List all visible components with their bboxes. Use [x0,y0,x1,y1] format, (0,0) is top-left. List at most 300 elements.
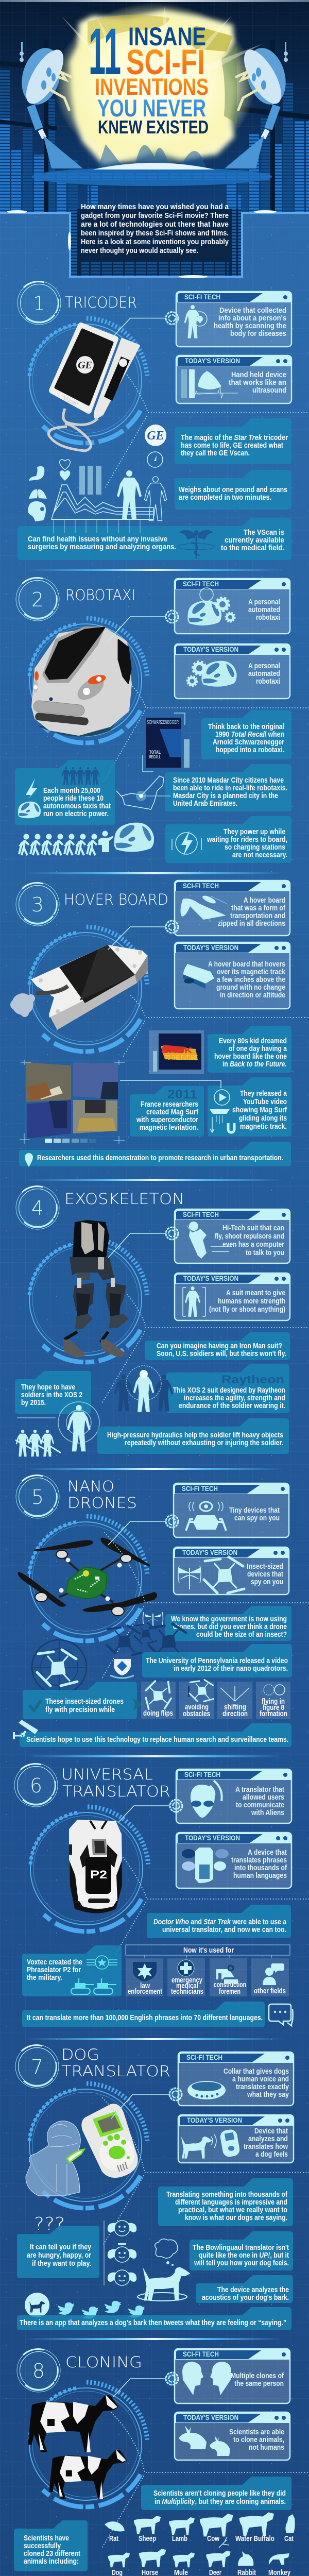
device: phraselator p2: P2 [90,1868,107,1881]
poster: total recall: RECALL [149,754,161,759]
icon: map pin [25,1153,33,1167]
icon: collar [187,2081,226,2099]
panel: sci-fi tech [178,2052,294,2106]
title: KNEW EXISTED [98,116,209,138]
dotted connector [102,1295,309,1402]
icon: figure solid [117,470,142,519]
callout: youtube [208,1077,291,1137]
panel: today's version: into thousands of [234,1863,287,1872]
panel: today's version: TODAY'S VERSION [183,943,238,952]
panel: today's version: Insect-sized [247,1562,283,1571]
callout: fly with precision: fly with precision while [45,1705,115,1714]
panel: sci-fi tech: that was a form of [231,904,286,912]
tile: shifting direction [217,1682,252,1719]
callout: masdar city [165,764,291,811]
badge 1 [18,281,61,325]
panel: today's version: a dog feels [255,2150,288,2159]
panel: today's version [178,2115,294,2163]
section 7: dog translator [15,2045,309,2340]
callout: translating: practical, but what we really want to [178,2206,287,2214]
gear marker [166,312,178,325]
callout: 23 animals: successfully [24,2541,61,2550]
panel: sci-fi tech: with Aliens [251,1808,284,1817]
panel: today's version: ground with no change [216,983,285,992]
ticks under chart [54,519,140,533]
icon: spy drone [186,1502,226,1531]
connector [108,1233,166,1258]
tile: figure 8: figure 8 [263,1703,284,1712]
panel: sci-fi tech: A translator that [235,1785,284,1794]
section 2: robotaxi [15,578,309,874]
callout: star trek: The magic of the Star Trek tricoder [181,433,288,442]
animal labels: Sheep [139,2534,156,2543]
tile: emergency medical technicians: emergency [171,1976,202,1985]
panel: sci-fi tech: what they say [247,2090,289,2099]
divider [26,2338,283,2340]
device: vscan [48,326,139,451]
panel: sci-fi tech: to communicate [236,1801,284,1809]
callout: hungry happy: are hungry, happy, or [27,2251,91,2260]
panel: sci-fi tech [176,292,291,347]
panel: sci-fi tech: health by scanning the [214,321,286,330]
hover board [10,945,148,1030]
tile: law enforcement: law [140,1981,150,1990]
section 1: tricoder [18,281,309,571]
callout: acoustics [196,2275,293,2303]
tile: shifting direction: direction [222,1709,248,1718]
figure: xos 2 soldier [114,1366,173,1412]
callout: 80s kid: Every 80s kid dreamed [219,1037,287,1045]
connector [108,927,166,950]
callout: doctor who: universal translator, and now we can too. [162,1925,286,1934]
panel: sci-fi tech: can spy on you [234,1514,280,1522]
gear marker [166,1515,178,1528]
panel: today's version [176,355,291,403]
panel: sci-fi tech: SCI-FI TECH [183,580,219,588]
callout: search and surveillance [20,1723,291,1747]
badge 5: 5 [31,1486,44,1509]
heading: universal translator: TRANSLATOR [62,1783,170,1800]
callout: multiplicity: in Multiplicity, but they are cloning animals. [154,2497,286,2506]
callout: 80s kid: of one day having a [229,1044,287,1053]
connector [108,1521,166,1545]
callout: doctor who: Doctor Who and Star Trek were able to use a [153,1918,287,1926]
panel: today's version [176,1833,291,1888]
panel: sci-fi tech: robotaxi [256,613,280,622]
callout: charging [165,816,291,863]
icons: dark drones [107,1623,187,1658]
header illustration [0,0,309,212]
badge 7: 7 [31,2056,43,2078]
platform [32,163,272,212]
icon: GE logo [145,425,166,446]
callout: hungry happy: if they want to play. [32,2259,91,2268]
panel: today's version: Hand held device [231,370,286,379]
section 3: hover board [10,880,309,1181]
callout: hungry happy [17,2226,99,2278]
section 4: exoskeleton [15,1186,309,1470]
heading: universal translator [61,1766,170,1800]
callout: monthly riders [15,760,115,825]
icons: queue of people [19,831,113,855]
callout: hydraulics [97,1418,289,1454]
callout: weight: Weighs about one pound and scans [179,485,287,494]
icon: military star [87,1956,117,1969]
callout: organs [18,518,291,560]
icon: flying suit [187,1222,231,1259]
callout: acoustics: acoustics of your dog's bark. [202,2293,289,2302]
connector [113,318,166,336]
intro text: Here is a look at some inventions you probably [81,238,229,246]
icon: gauge [147,452,163,467]
intro text [81,202,229,255]
heading: dog translator: TRANSLATOR [61,2062,170,2080]
panel: sci-fi tech: allowed users [243,1793,284,1802]
animal labels: Rat [109,2534,118,2543]
heading: nano drones: DRONES [67,1494,137,1512]
callout: charging: are not necessary. [232,851,287,859]
panel: today's version: to clone animals, [233,2435,284,2444]
panel: sci-fi tech: SCI-FI TECH [183,2350,219,2358]
tile: figure 8 [256,1682,290,1719]
panel: today's version: translates how [244,2142,288,2151]
intro text: gadget from your favorite Sci-Fi movie? There [81,211,229,220]
dotted connector [122,995,309,1058]
icon: penn shield [110,1654,134,1678]
panel: today's version: human languages [233,1871,287,1880]
icon: two heads [182,2362,231,2395]
quadrotor [18,1538,157,1616]
panel: today's version [174,1547,289,1595]
callout: total recall: 1990 Total Recall when [215,730,284,739]
panel: today's version: A device that [248,1848,287,1857]
badge 1: 1 [33,292,45,315]
panel: sci-fi tech: fly, shoot repulsors and [215,1232,284,1241]
callout: research [19,1142,291,1167]
dotted connector [102,2098,309,2246]
poster: total recall: SCHWARZENEGGER [147,719,179,725]
callout: iron man: Can you imagine having an Iron Man suit? [157,1342,282,1350]
intro text: never thought you would actually see. [81,246,198,255]
icon: check [29,1700,41,1710]
animal labels: Cow [207,2534,219,2543]
callout: 2011 mag surf: 2011 [167,1088,197,1101]
cows [28,2395,127,2499]
callout: 2011 mag surf: magnetic levitation. [140,1123,198,1132]
used for heading [126,1945,290,1958]
panel: today's version: TODAY'S VERSION [187,2116,242,2124]
gear marker [166,1227,178,1240]
device: vscan: GE [78,360,92,371]
vehicle: taxi side [114,823,154,852]
panel: today's version: ultrasound [252,386,286,395]
heading: cloning: CLONING [65,2353,142,2371]
callout: youtube: magnetic track. [240,1122,287,1131]
tile: figure 8: flying in [262,1697,285,1706]
callout: masdar city: Since 2010 Masdar City citizens have [173,776,284,785]
callout: youtube: YouTube video [243,1097,287,1106]
panel: sci-fi tech: A personal [248,598,280,606]
callout: charging: so charging stations [225,843,285,852]
callout: soldiers by 2015 [15,1371,91,1414]
badge 4 [16,1186,59,1229]
panel: sci-fi tech [176,1769,291,1823]
panel: sci-fi tech [175,579,290,634]
animal labels: Lamb [172,2534,187,2543]
tile: law enforcement [126,1958,163,1996]
icon: dragonfly [143,1612,163,1628]
callout: 2011 mag surf: created Mag Surf [146,1108,199,1116]
panel: today's version: in direction or altitude [220,991,285,999]
callout: 2011 mag surf: with superconductor [136,1115,198,1124]
callout: monthly riders: people ride these 10 [43,794,104,803]
callout: monthly riders: Each month 25,000 [43,786,100,795]
panel: sci-fi tech: Collar that gives dogs [224,2067,289,2076]
connector [108,617,166,641]
badge 2: 2 [31,588,44,611]
callout: total recall: hopped into a robotaxi. [216,745,284,754]
poster: total recall: TOTAL [149,750,161,755]
title: YOU NEVER [97,94,206,122]
callout: organs: Can find health issues without any invasive [28,535,167,544]
callout: bowlinguaul: quite like the one in UP!, but it [199,2251,289,2260]
tile: emergency medical technicians: medical [176,1981,198,1990]
callout: translating [158,2178,293,2226]
hud ring [29,618,147,743]
callout: voxtec: Phraselator P2 for [27,1965,81,1974]
callout: total recall: Arnold Schwarzenegger [213,738,284,747]
hud ring [29,318,147,443]
panel: today's version: a few inches above the [217,975,285,984]
callout: 2011 mag surf: France researchers [141,1100,198,1109]
panel: today's version: TODAY'S VERSION [183,645,238,653]
animal labels [109,2534,294,2576]
icon: dog app [25,2293,49,2317]
panel: today's version [175,644,290,699]
icon: people [61,767,100,785]
badge 3: 3 [31,893,44,916]
panel: sci-fi tech: the same person [234,2379,284,2388]
badge 5 [16,1475,59,1518]
panel: sci-fi tech: even has a computer [222,1240,284,1249]
panel: today's version: over its magnetic track [217,968,286,976]
panel: today's version: TODAY'S VERSION [185,1834,240,1842]
panel: today's version: devices that [247,1570,283,1579]
tile: construction foremen [210,1958,247,1996]
heading: dog translator: DOG [61,2046,99,2063]
panel: today's version [175,2412,290,2460]
callout: university of pennsylvania [142,1644,292,1677]
callout: iron man [145,1332,290,1360]
chart: scan waves [52,485,153,519]
callout: star trek: has come to life, GE created what [181,441,283,450]
section 6: universal translator [14,1764,309,2040]
heading: hover board: HOVER BOARD [64,891,168,908]
icon: figure outline [144,477,167,520]
callout: star trek: they call the GE Vscan. [181,449,250,457]
callout: youtube: They released a [240,1089,287,1098]
icon: targeted suit [58,1402,99,1451]
title [89,15,209,138]
map: uae [116,776,171,809]
icon: small taxi [18,802,41,818]
panel: sci-fi tech: SCI-FI TECH [182,1484,218,1493]
panel: today's version: humans more strength [218,1297,285,1306]
gear marker [170,1800,182,1812]
left lamp [16,42,83,168]
icon: chat bubbles [269,2004,293,2026]
divider [26,2038,283,2040]
panel: sci-fi tech: Multiple clones of [231,2371,284,2380]
callout: charging: They power up while [224,827,285,836]
panel: sci-fi tech [175,880,290,936]
badge 8: 8 [32,2360,45,2382]
icon: bolt recharge [172,831,201,856]
section 8: cloning [14,2349,309,2576]
callout: charging: waiting for riders to board, [207,835,287,844]
panel: sci-fi tech: Hi-Tech suit that can [222,1224,284,1232]
poster: back to the future: TO THE FUTURE [165,1054,198,1061]
callout: raytheon [166,1364,289,1413]
tile: shifting direction: shifting [224,1703,246,1711]
tile: figure 8: formation [260,1709,287,1718]
title: SCI-FI [126,42,205,82]
panel: sci-fi tech: info about a person's [218,314,286,323]
intro text: been inspired by these Sci-Fi shows and films. [81,229,229,238]
animal labels: Water Buffalo [235,2534,274,2543]
panel: today's version: analyzes and [248,2134,288,2143]
tile: construction foremen: construction [214,1980,246,1989]
icons: dog moods [104,2221,136,2285]
panel: today's version: translates phrases [231,1856,287,1865]
panel: sci-fi tech: SCI-FI TECH [184,1770,220,1778]
icon: suit figure [183,1286,205,1317]
icon: camera [13,1720,38,1739]
gear marker [166,921,178,933]
panel: sci-fi tech [174,1483,289,1537]
panel: sci-fi tech: transportation and [230,911,285,920]
tile: avoiding obstacles: obstacles [183,1709,210,1718]
gear marker [166,611,178,623]
callout: hungry happy: It can tell you if they [30,2243,92,2251]
hud ring [30,1807,148,1931]
connector [113,2379,166,2397]
dotted connector [105,375,309,489]
panel: sci-fi tech: SCI-FI TECH [186,2053,222,2061]
callout: youtube: showing Mag Surf [232,1106,287,1114]
callout: 23 animals: Scientists have [24,2534,69,2543]
panel: sci-fi tech: SCI-FI TECH [183,1210,219,1218]
panel: today's version: robotaxi [256,677,280,686]
panel: today's version: A personal [248,662,280,670]
callout: 2011 mag surf [130,1086,204,1137]
panel: today's version: TODAY'S VERSION [182,1548,237,1556]
section 5: nano drones [13,1475,309,1757]
heading: dog translator [61,2046,170,2080]
tile: other fields: other fields [254,1987,286,1995]
callout: voxtec: Voxtec created the [27,1958,82,1967]
device: vscan: Vscan [62,395,79,408]
panel: sci-fi tech: zipped in all directions [218,919,285,928]
callout: organs: The VScan is [244,528,284,537]
intro text: are a lot of technologies out there that have [81,220,229,229]
callout: youtube: gliding along its [239,1114,287,1123]
callout: 23 animals [14,2520,88,2571]
icon: robotaxi and gears [187,588,235,625]
panel: today's version: Scientists are able [229,2428,284,2436]
heading: nano drones [67,1478,137,1512]
tile: law enforcement: enforcement [128,1987,162,1996]
callout: organs: currently available [225,536,284,545]
panel: sci-fi tech: automated [248,605,280,614]
panel: today's version: spy on you [251,1578,283,1586]
callout: organs: to the medical field. [221,544,284,552]
callout: voxtec [22,1945,122,1996]
icon: crosshair drone [32,1640,87,1694]
exoskeleton [63,1220,129,1358]
callout: raytheon: Raytheon [221,1373,284,1386]
device: phraselator p2 [69,1820,122,1913]
callout: soldiers by 2015: They hope to have [21,1383,75,1392]
icon: caduceus [178,530,215,558]
divider [26,872,283,874]
callout: masdar city: United Arab Emirates. [173,799,237,808]
divider [26,1468,283,1470]
icon: bolt [26,778,37,799]
heading: universal translator: UNIVERSAL [61,1766,153,1783]
gear marker [166,2372,178,2385]
callout: fly with precision [23,1682,143,1719]
callout: total recall: Think back to the original [208,722,284,731]
tile: avoiding obstacles: avoiding [185,1703,209,1711]
panel: sci-fi tech: body for diseases [230,329,286,338]
callout: 100,000 phrases [22,2002,265,2027]
panel: today's version: that works like an [229,378,286,387]
icon: dog and device [181,2128,241,2159]
hud ring [29,927,147,1052]
callout: voxtec: the military. [27,1973,62,1982]
callout: weight [175,470,291,510]
panel: today's version: A suit meant to give [226,1289,285,1297]
heading: nano drones: NANO [67,1478,114,1495]
callout: twitter app [17,2307,291,2330]
panel: today's version: automated [248,669,280,678]
callout: soldiers by 2015: by 2015. [21,1398,46,1407]
question marks: ??? [34,2214,65,2234]
divider [26,1179,283,1181]
right lamp [225,42,291,168]
icon: tanks [71,1978,116,1994]
divider [26,569,283,571]
connector [118,1806,170,1822]
badge 8 [17,2349,60,2392]
panel: sci-fi tech: to talk to you [246,1248,284,1257]
callout: fly with precision: These insect-sized drones [45,1697,124,1706]
dotted connector [102,2413,309,2547]
title: INVENTIONS [95,74,209,100]
icon: ultrasound [181,369,238,398]
callout: bowlinguaul [190,2231,293,2270]
panel: sci-fi tech: SCI-FI TECH [183,882,219,890]
panel: sci-fi tech: Device that collected [219,306,286,315]
badge 2 [16,578,59,621]
badge 3 [16,883,59,926]
callout: insect sized [165,1606,291,1641]
poster: total recall [143,713,190,772]
panel: today's version [175,942,290,1009]
callout: raytheon: endurance of the soldier wearing it. [179,1401,285,1410]
icons: organs and hearts [28,460,101,521]
